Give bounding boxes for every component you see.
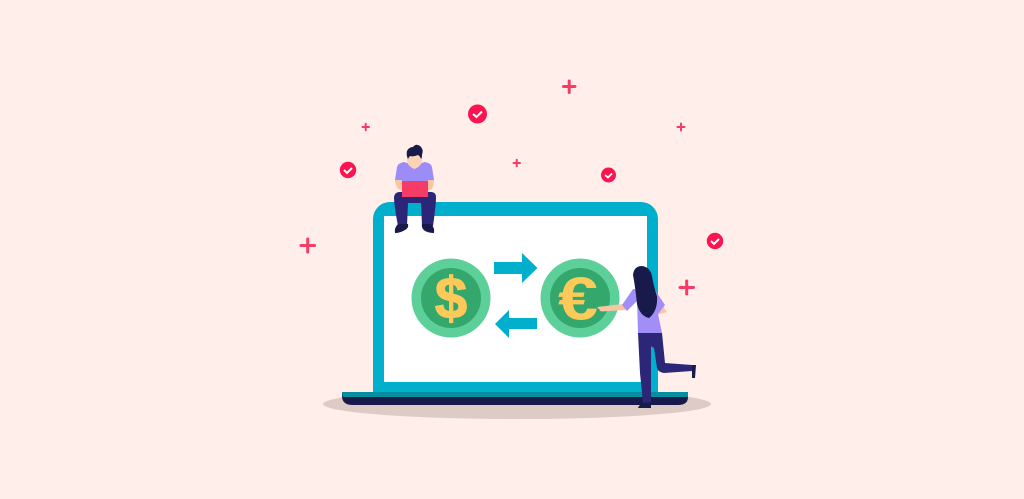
- woman trailing leg: [649, 333, 692, 373]
- icon: check badge top: [468, 104, 487, 124]
- laptop base highlight: [342, 392, 688, 397]
- woman standing leg: [638, 333, 655, 403]
- woman arm pointing: [597, 304, 626, 312]
- man arms: [395, 178, 434, 191]
- man laptop: [402, 181, 428, 197]
- man hair: [407, 145, 423, 159]
- icon: check badge left: [340, 162, 356, 178]
- arrow: right: [494, 253, 538, 283]
- arrow: left: [495, 310, 537, 338]
- man neck and head: [407, 155, 422, 169]
- laptop base: [342, 392, 688, 405]
- icon: euro coin: [540, 258, 620, 338]
- man legs: [394, 192, 436, 226]
- laptop shadow: [323, 389, 711, 419]
- icon: check badge middle: [601, 168, 616, 182]
- laptop screen: [384, 216, 647, 382]
- icon: plus signs: [301, 81, 694, 294]
- man sitting on laptop: [394, 145, 436, 233]
- woman arm back: [657, 305, 667, 315]
- laptop: [342, 202, 688, 405]
- woman shoes: [638, 365, 696, 408]
- woman hair: [633, 266, 657, 318]
- dollar sign: $: [435, 266, 467, 331]
- icon: dollar coin: [412, 258, 490, 338]
- woman pointing at euro: [597, 266, 696, 408]
- icon: check badge right: [707, 233, 723, 249]
- man shoes: [395, 224, 434, 233]
- laptop screen frame: [373, 202, 658, 393]
- woman shirt: [622, 289, 665, 333]
- euro sign: €: [558, 266, 598, 333]
- man shirt: [395, 162, 434, 184]
